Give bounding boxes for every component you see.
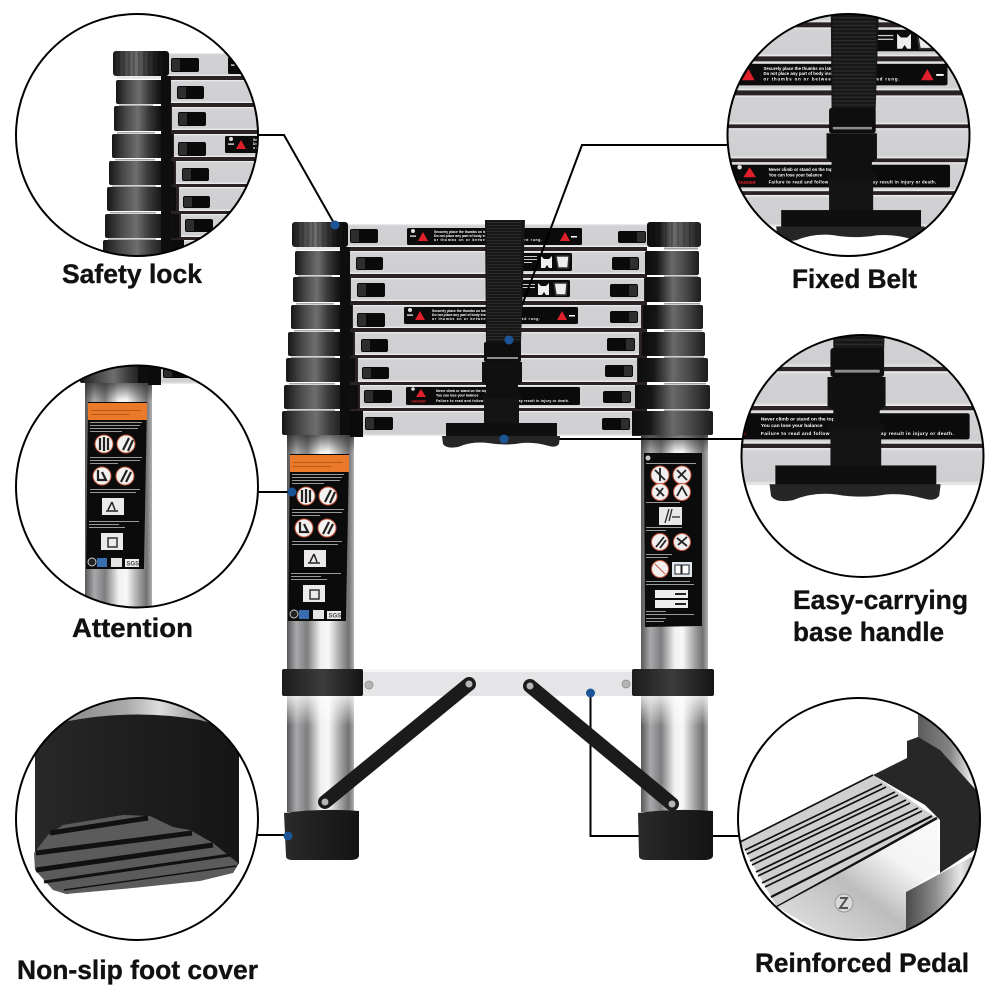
left collars stack xyxy=(282,247,363,437)
warning label: rung 3 xyxy=(505,280,570,297)
warning label: rung 1: or thumbs on or between rung or secured rung. xyxy=(434,238,542,242)
slot highlights xyxy=(351,230,645,429)
warning label: rung 1 xyxy=(407,228,582,245)
warning label: rung 4: or thumbs on or between rung or secured rung. xyxy=(432,317,540,321)
upper tube xyxy=(918,714,975,789)
buckle xyxy=(482,342,522,426)
rung slots xyxy=(350,229,646,430)
right collars stack xyxy=(632,248,713,435)
warning label: rung 1: Do not place any part of body inside xyxy=(434,234,493,238)
left clamp band xyxy=(282,669,363,696)
label: safety lock: Safety lock xyxy=(62,259,203,289)
right lower tube xyxy=(641,432,708,812)
right instruction sticker xyxy=(644,453,702,627)
callout dots xyxy=(284,220,595,840)
left safety lock cap xyxy=(292,222,348,247)
danger label: rung 7: You can lose your balance xyxy=(436,394,479,398)
ladder lower parts xyxy=(284,680,713,860)
connector: pedal foot to circle xyxy=(712,835,739,837)
left foot cover xyxy=(284,810,359,860)
right brace arm xyxy=(526,682,676,808)
label: attention: Attention xyxy=(72,613,193,643)
connector: attention xyxy=(258,491,292,493)
tread surface xyxy=(34,815,238,894)
warning label: rung 2 xyxy=(505,253,572,271)
silver tube end xyxy=(67,699,208,722)
connector: safety lock xyxy=(256,135,335,225)
connector: foot cover xyxy=(258,834,288,836)
label: easy-carrying base handle: Easy-carrying xyxy=(793,585,968,615)
ridged tread xyxy=(740,775,937,907)
warning label: rung 4 xyxy=(404,307,578,324)
connector: fixed belt xyxy=(509,145,728,340)
danger label: rung 7: Failure to read and follow the instructions may result in injury or death. xyxy=(436,399,569,403)
connector: pedal bar to circle xyxy=(590,693,640,836)
right clamp band xyxy=(632,669,714,696)
pedal screw xyxy=(835,894,853,912)
left instruction sticker xyxy=(288,454,349,621)
label: non-slip foot cover: Non-slip foot cover xyxy=(17,955,258,985)
strap xyxy=(485,220,525,343)
panel: fixed belt xyxy=(726,13,970,257)
right foot cover xyxy=(638,810,713,860)
panel: attention xyxy=(15,364,259,608)
label: easy-carrying base handle xyxy=(793,585,968,647)
label: easy-carrying base handle: base handle xyxy=(793,617,944,647)
panel: reinforced pedal xyxy=(738,690,990,945)
connector: base handle xyxy=(556,438,742,440)
left brace arm xyxy=(322,680,472,806)
left instruction sticker: SGS xyxy=(328,614,341,620)
front face xyxy=(777,836,940,939)
panel: safety lock xyxy=(15,13,259,257)
left lower tube xyxy=(287,432,354,812)
fixed belt and handle xyxy=(442,220,560,448)
label: fixed belt: Fixed Belt xyxy=(792,264,917,294)
dark backing between rungs xyxy=(347,224,647,436)
label: reinforced pedal: Reinforced Pedal xyxy=(755,948,969,978)
warning label: rung 4: Securely place the thumbs on latch xyxy=(432,309,489,313)
right safety lock cap xyxy=(647,222,701,247)
rungs xyxy=(347,224,648,436)
warning label: rung 1: Securely place the thumbs on latch xyxy=(434,230,491,234)
lower tube xyxy=(906,856,973,930)
panel: easy-carrying base handle xyxy=(740,334,984,578)
warning label: rung 4: Do not place any part of body inside xyxy=(432,313,491,317)
tread grooves xyxy=(36,818,236,890)
black foot body xyxy=(34,714,240,894)
danger label: rung 7 xyxy=(406,387,580,405)
danger label: rung 7: DANGER xyxy=(412,400,426,404)
danger label: rung 7: Never climb or stand on the top xyxy=(436,389,487,393)
middle spreader bar xyxy=(363,669,633,696)
black pedal bracket xyxy=(873,737,985,873)
handle pad xyxy=(442,423,560,448)
telescopic ladder body xyxy=(282,222,714,812)
tread ridges xyxy=(740,775,937,907)
panel: non-slip foot cover xyxy=(15,690,258,940)
